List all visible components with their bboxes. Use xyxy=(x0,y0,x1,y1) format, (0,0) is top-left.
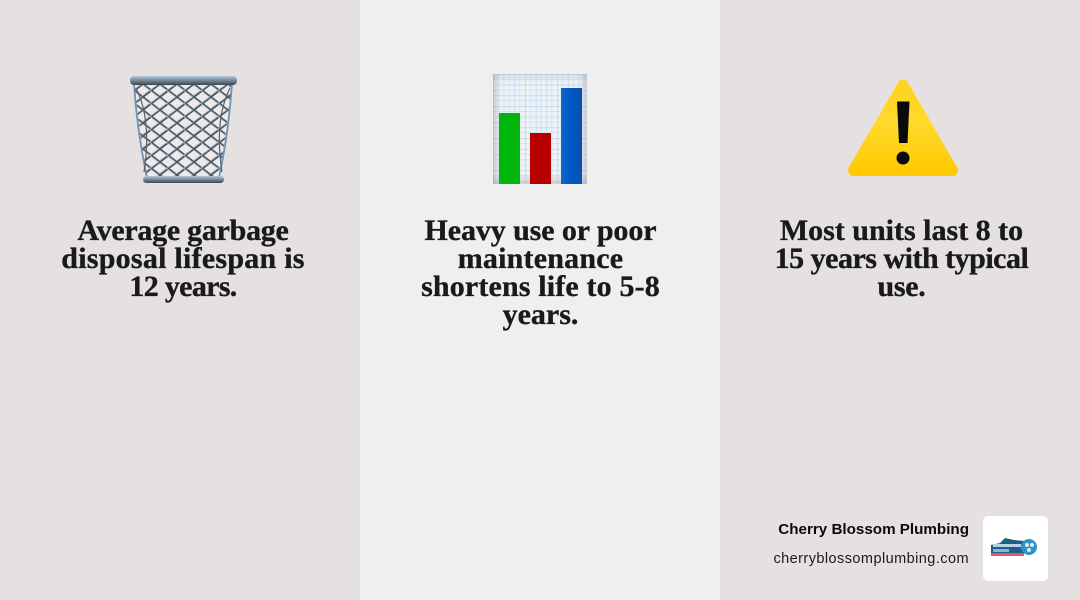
panel: average lifespan xyxy=(0,0,360,600)
icon: warning triangle xyxy=(848,80,958,176)
heading: heavy use: maintenance xyxy=(458,242,623,275)
heading: average lifespan: disposal lifespan is xyxy=(61,242,305,275)
panel: heavy use xyxy=(360,0,720,600)
basket rims xyxy=(130,76,237,85)
heading: average lifespan: 12 years. xyxy=(129,270,237,303)
heading: heavy use: shortens life to 5-8 xyxy=(421,270,660,303)
panel: typical use xyxy=(720,0,1080,600)
bars xyxy=(499,88,582,184)
website: cherryblossomplumbing.com xyxy=(773,550,969,566)
heading: heavy use: years. xyxy=(503,298,578,331)
heading: typical use xyxy=(775,214,1028,303)
heading: typical use: use. xyxy=(878,270,925,303)
heading: average lifespan xyxy=(61,214,305,303)
heading: heavy use xyxy=(421,214,660,331)
brand name: Cherry Blossom Plumbing xyxy=(778,520,969,538)
heading: typical use: Most units last 8 to xyxy=(780,214,1023,247)
icon: bar chart xyxy=(493,74,587,184)
logo card xyxy=(983,516,1048,581)
heading: average lifespan: Average garbage xyxy=(77,214,289,247)
heading: typical use: 15 years with typical xyxy=(775,242,1028,275)
heading: heavy use: Heavy use or poor xyxy=(425,214,656,247)
icon: wire wastebasket xyxy=(130,76,237,183)
icon: company logo xyxy=(991,538,1037,556)
basket sides xyxy=(134,84,232,178)
